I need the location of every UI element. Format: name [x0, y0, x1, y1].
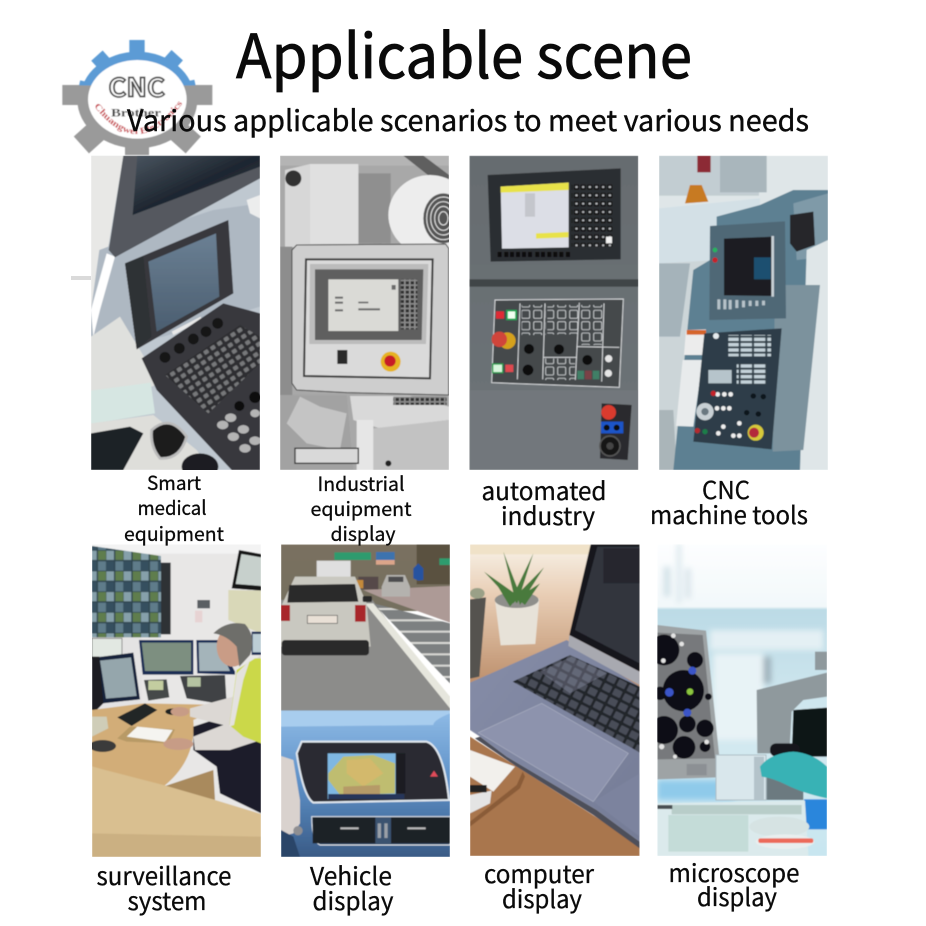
panel: microscope display photo [649, 543, 827, 856]
subtitle: Various applicable scenarios to meet various needs [127, 98, 809, 140]
caption: microscope display [668, 855, 800, 914]
caption: automated industry: automated [482, 473, 606, 508]
operator panel [492, 299, 623, 387]
laptop hinge and screen [568, 635, 640, 685]
caption: surveillance system [96, 858, 232, 918]
keyboard console [142, 303, 260, 470]
panel: CNC machine tools photo [659, 156, 828, 470]
molecule monitor [657, 625, 719, 779]
fan [388, 174, 449, 248]
emergency stop [381, 352, 401, 372]
panel: computer display photo [470, 544, 640, 856]
caption: microscope display: microscope [668, 855, 800, 890]
caption: industrial equipment display [310, 468, 412, 547]
caption: vehicle display: Vehicle [310, 858, 392, 893]
upper monitor [109, 156, 260, 257]
caption: surveillance system: system [128, 883, 206, 918]
trackpad [478, 703, 628, 802]
clipboard [117, 727, 175, 743]
handwheel pendant [600, 403, 632, 460]
caption: automated industry [482, 473, 606, 533]
small grey dash [71, 276, 91, 280]
microscope body [757, 673, 827, 753]
caption: CNC machine tools: CNC [702, 472, 750, 507]
desk [92, 702, 204, 786]
machine body [673, 190, 828, 470]
mesh pen cup [470, 597, 486, 679]
Brother wordmark: Brother [111, 107, 161, 119]
phones and keyboard [144, 679, 169, 701]
icon: CNC gear logo [62, 39, 213, 156]
side stripe [773, 285, 820, 452]
vents [312, 817, 450, 845]
silver car [281, 577, 371, 647]
caption: smart medical equipment: equipment [124, 518, 225, 547]
monitor [709, 221, 786, 320]
man [163, 623, 261, 813]
caption: computer display [484, 856, 594, 916]
road [281, 597, 450, 712]
distant car [382, 575, 410, 597]
desk monitors [139, 640, 193, 675]
caption: smart medical equipment: Smart [147, 467, 202, 496]
lower bracket [280, 395, 292, 396]
caption: CNC machine tools [650, 472, 808, 532]
notebook and business card [470, 750, 515, 792]
blue upper gear [78, 39, 196, 86]
keyboard [513, 655, 640, 753]
caption: smart medical equipment: medical [138, 492, 206, 521]
warning labels [684, 329, 706, 355]
caption: vehicle display [310, 858, 394, 918]
red arc text [94, 103, 183, 134]
caption: smart medical equipment [124, 467, 225, 547]
blurred background laboratory [657, 543, 823, 800]
navigation head unit [297, 742, 449, 803]
CNC letters: CNC [108, 68, 165, 104]
caption: automated industry: industry [501, 498, 595, 533]
caption: industrial equipment display: display [330, 518, 396, 547]
hand and wheel [281, 756, 300, 837]
caption: vehicle display: display [312, 883, 394, 918]
probe holder [91, 383, 155, 424]
panel: surveillance system photo [89, 544, 261, 857]
teal glove [760, 752, 827, 798]
beaker [716, 755, 766, 800]
panel: automated industry photo [469, 156, 638, 470]
panel: smart medical equipment photo [91, 156, 261, 480]
caption: CNC machine tools: machine tools [650, 497, 808, 532]
small ultrasound screen [125, 220, 233, 349]
dashboard [281, 711, 450, 857]
icon: CNC gear logo: Chuangwei Electronics [95, 101, 182, 135]
key switch box [790, 212, 815, 252]
caption: surveillance system: surveillance [96, 858, 232, 893]
caption: computer display: display [502, 881, 582, 916]
road signs [334, 552, 371, 560]
video wall [92, 546, 161, 637]
navigation map [328, 753, 396, 799]
screen [328, 279, 398, 331]
wall map and monitor [228, 590, 261, 633]
title: Applicable scene [236, 7, 692, 96]
control box [292, 244, 449, 395]
caption: industrial equipment display: Industrial [318, 468, 404, 497]
laptop base [470, 640, 640, 842]
lab bench dishes [657, 801, 808, 856]
caption: microscope display: display [697, 879, 777, 914]
caption: industrial equipment display: equipment [310, 493, 412, 522]
white logo disc [88, 60, 187, 139]
CNC control head [488, 168, 621, 262]
grey lower gear [62, 84, 213, 156]
panel: vehicle display photo [281, 544, 450, 857]
panel: industrial equipment display photo [280, 156, 449, 470]
wood table foreground [470, 737, 640, 856]
blue rack [804, 799, 827, 829]
caption: computer display: computer [484, 856, 594, 891]
potted plant [484, 552, 544, 645]
control keypad [693, 328, 782, 449]
